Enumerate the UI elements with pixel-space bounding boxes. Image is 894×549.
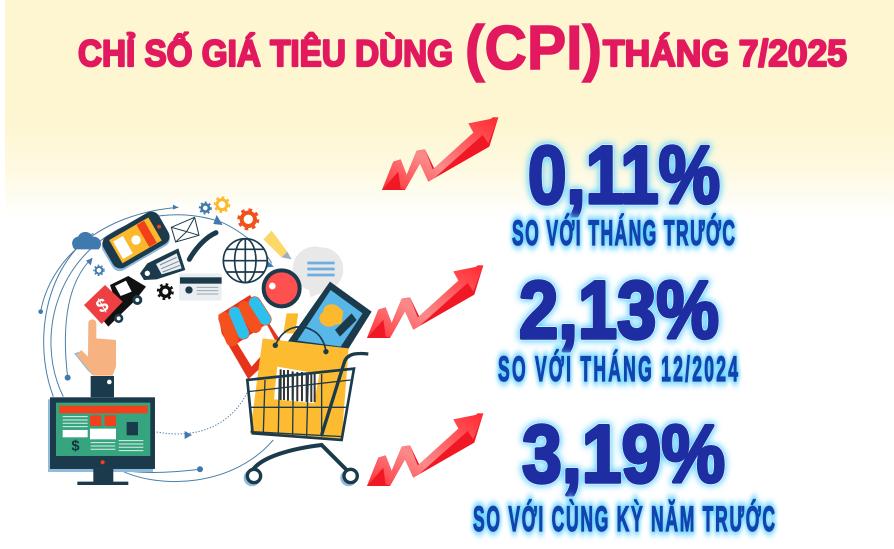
stat: 0,11% so với tháng trước: SO VỚI THÁNG TRƯỚC (512, 213, 735, 253)
icon: store (218, 295, 281, 379)
stat: 0,11% so với tháng trước: SO VỚI THÁNG TRƯỚC (512, 213, 735, 253)
icon: tablet (287, 282, 372, 352)
stat: 3,19% so với cùng kỳ năm trước: SO VỚI CÙNG KỲ NĂM TRƯỚC (473, 499, 775, 539)
stat: 0,11% so với tháng trước (512, 130, 735, 253)
icon: cloud (72, 232, 101, 249)
stat: 3,19% so với cùng kỳ năm trước: 3,19% (522, 409, 725, 500)
stat: 0,11% so với tháng trước: 0,11% (528, 130, 720, 221)
icon: gears (94, 197, 258, 299)
icon: magnifier (264, 270, 300, 333)
illustration: online shopping (38, 197, 372, 486)
stat: 3,19% so với cùng kỳ năm trước: 3,19% (522, 409, 725, 500)
stat: 2,13% so với tháng 12/2024: 2,13% (519, 265, 719, 356)
icon: phone handset (189, 233, 216, 259)
stat: 0,11% so với tháng trước: 0,11% (528, 130, 720, 221)
title: CHỈ SỐ GIÁ TIÊU DÙNG (78, 32, 453, 74)
icon: credit card (179, 273, 222, 301)
stat: 2,13% so với tháng 12/2024: 2,13% (519, 265, 719, 356)
arrow 2 (367, 265, 483, 338)
icon: globe (223, 239, 267, 283)
arrow 1 (382, 117, 498, 190)
title (78, 14, 847, 83)
title: (CPI) (465, 14, 602, 83)
stat: 2,13% so với tháng 12/2024 (498, 265, 738, 389)
icon: shopping cart (247, 353, 368, 472)
stat: 3,19% so với cùng kỳ năm trước: 3,19% (522, 409, 725, 500)
icon: computer monitor (48, 397, 155, 485)
stat: 2,13% so với tháng 12/2024: SO VỚI THÁNG 12/2024 (498, 349, 738, 389)
stat: 2,13% so với tháng 12/2024: 2,13% (519, 265, 719, 356)
title: THÁNG 7/2025 (603, 33, 847, 74)
icon: truck and money box (84, 276, 146, 327)
arrow 3 (367, 413, 483, 486)
icon: speech bubble (293, 247, 343, 297)
icon: pointing hand (74, 319, 116, 397)
icon: cart wheels (244, 469, 357, 486)
icon: envelope (171, 217, 199, 242)
orbit lines (38, 205, 274, 482)
stat: 3,19% so với cùng kỳ năm trước (473, 409, 775, 539)
icon: pencil (263, 231, 292, 259)
stat: 0,11% so với tháng trước: 0,11% (528, 130, 720, 221)
icon: shopping bag (250, 327, 349, 440)
icon: computer monitor: $ (71, 439, 79, 455)
icon: smartphone (98, 208, 174, 274)
icon: truck and money box: $ (93, 294, 113, 318)
icon: price tag (140, 248, 185, 280)
stat: 2,13% so với tháng 12/2024: SO VỚI THÁNG 12/2024 (498, 349, 738, 389)
stat: 3,19% so với cùng kỳ năm trước: SO VỚI CÙNG KỲ NĂM TRƯỚC (473, 499, 775, 539)
